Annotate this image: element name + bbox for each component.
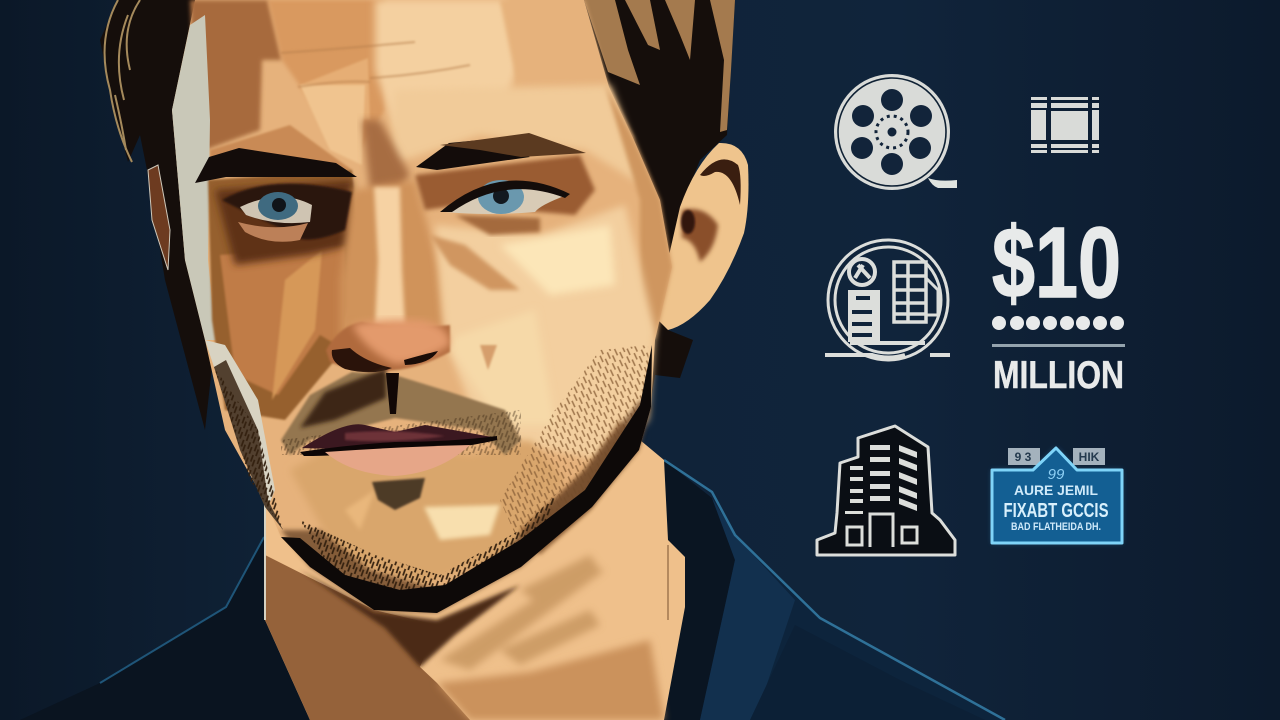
eye: left xyxy=(222,184,352,242)
blond streaks, right xyxy=(584,0,735,132)
stubble along jaw xyxy=(281,400,651,613)
icon: neon sign xyxy=(992,448,1122,543)
icon: neon sign: 99 xyxy=(1048,466,1065,483)
chin xyxy=(290,440,565,585)
black jaw line xyxy=(281,345,652,613)
left stubble xyxy=(214,360,283,530)
icon: office building xyxy=(817,426,955,555)
dark hair mass, right xyxy=(584,0,735,400)
neck shadow, left xyxy=(265,555,470,720)
ear, right xyxy=(655,143,748,330)
icon: neon sign: HIK xyxy=(1079,450,1100,464)
blond strands, left xyxy=(105,0,140,162)
neck streaks xyxy=(440,555,605,670)
beard xyxy=(214,345,652,613)
row of dots xyxy=(992,316,1124,330)
eye: right xyxy=(440,180,570,214)
icon: neon sign: AURE JEMIL xyxy=(1014,482,1098,498)
forehead wrinkles xyxy=(281,42,470,87)
jaw stubble, right xyxy=(500,345,650,545)
right cheek xyxy=(435,205,655,460)
right temple shade xyxy=(605,85,672,340)
left ear sliver xyxy=(148,165,170,270)
neck bottom tone xyxy=(437,640,664,720)
nose xyxy=(326,320,450,372)
stat label: MILLION xyxy=(993,354,1124,397)
stat: $10 million xyxy=(992,207,1125,397)
icon: film frame xyxy=(1031,97,1099,153)
cheek beside left stubble xyxy=(205,340,275,507)
shirt xyxy=(20,460,1005,720)
icon: neon sign: FIXABT GCCIS xyxy=(1004,500,1108,522)
face facets xyxy=(172,0,672,507)
face xyxy=(172,0,672,613)
right eye socket xyxy=(415,155,595,215)
stat number: $10 xyxy=(992,207,1121,319)
dark hair mass, left xyxy=(100,0,215,430)
brow furrow xyxy=(362,120,410,190)
portrait of a man xyxy=(20,0,1005,720)
moustache xyxy=(281,368,521,455)
divider xyxy=(992,344,1125,347)
icon: neon sign: BAD FLATHEIDA DH. xyxy=(1011,521,1101,533)
forehead tones xyxy=(190,0,282,150)
temple highlight band xyxy=(172,15,216,340)
icon: circular building emblem xyxy=(825,240,950,360)
left cheek shade xyxy=(208,170,360,420)
icon: film reel xyxy=(834,74,957,190)
nose bridge xyxy=(340,180,445,345)
neck xyxy=(264,440,685,720)
icon: neon sign: 9 3 xyxy=(1015,450,1032,464)
mouth xyxy=(300,424,497,476)
eyebrows xyxy=(195,133,586,183)
soul patch xyxy=(372,478,425,510)
hair xyxy=(100,0,735,430)
